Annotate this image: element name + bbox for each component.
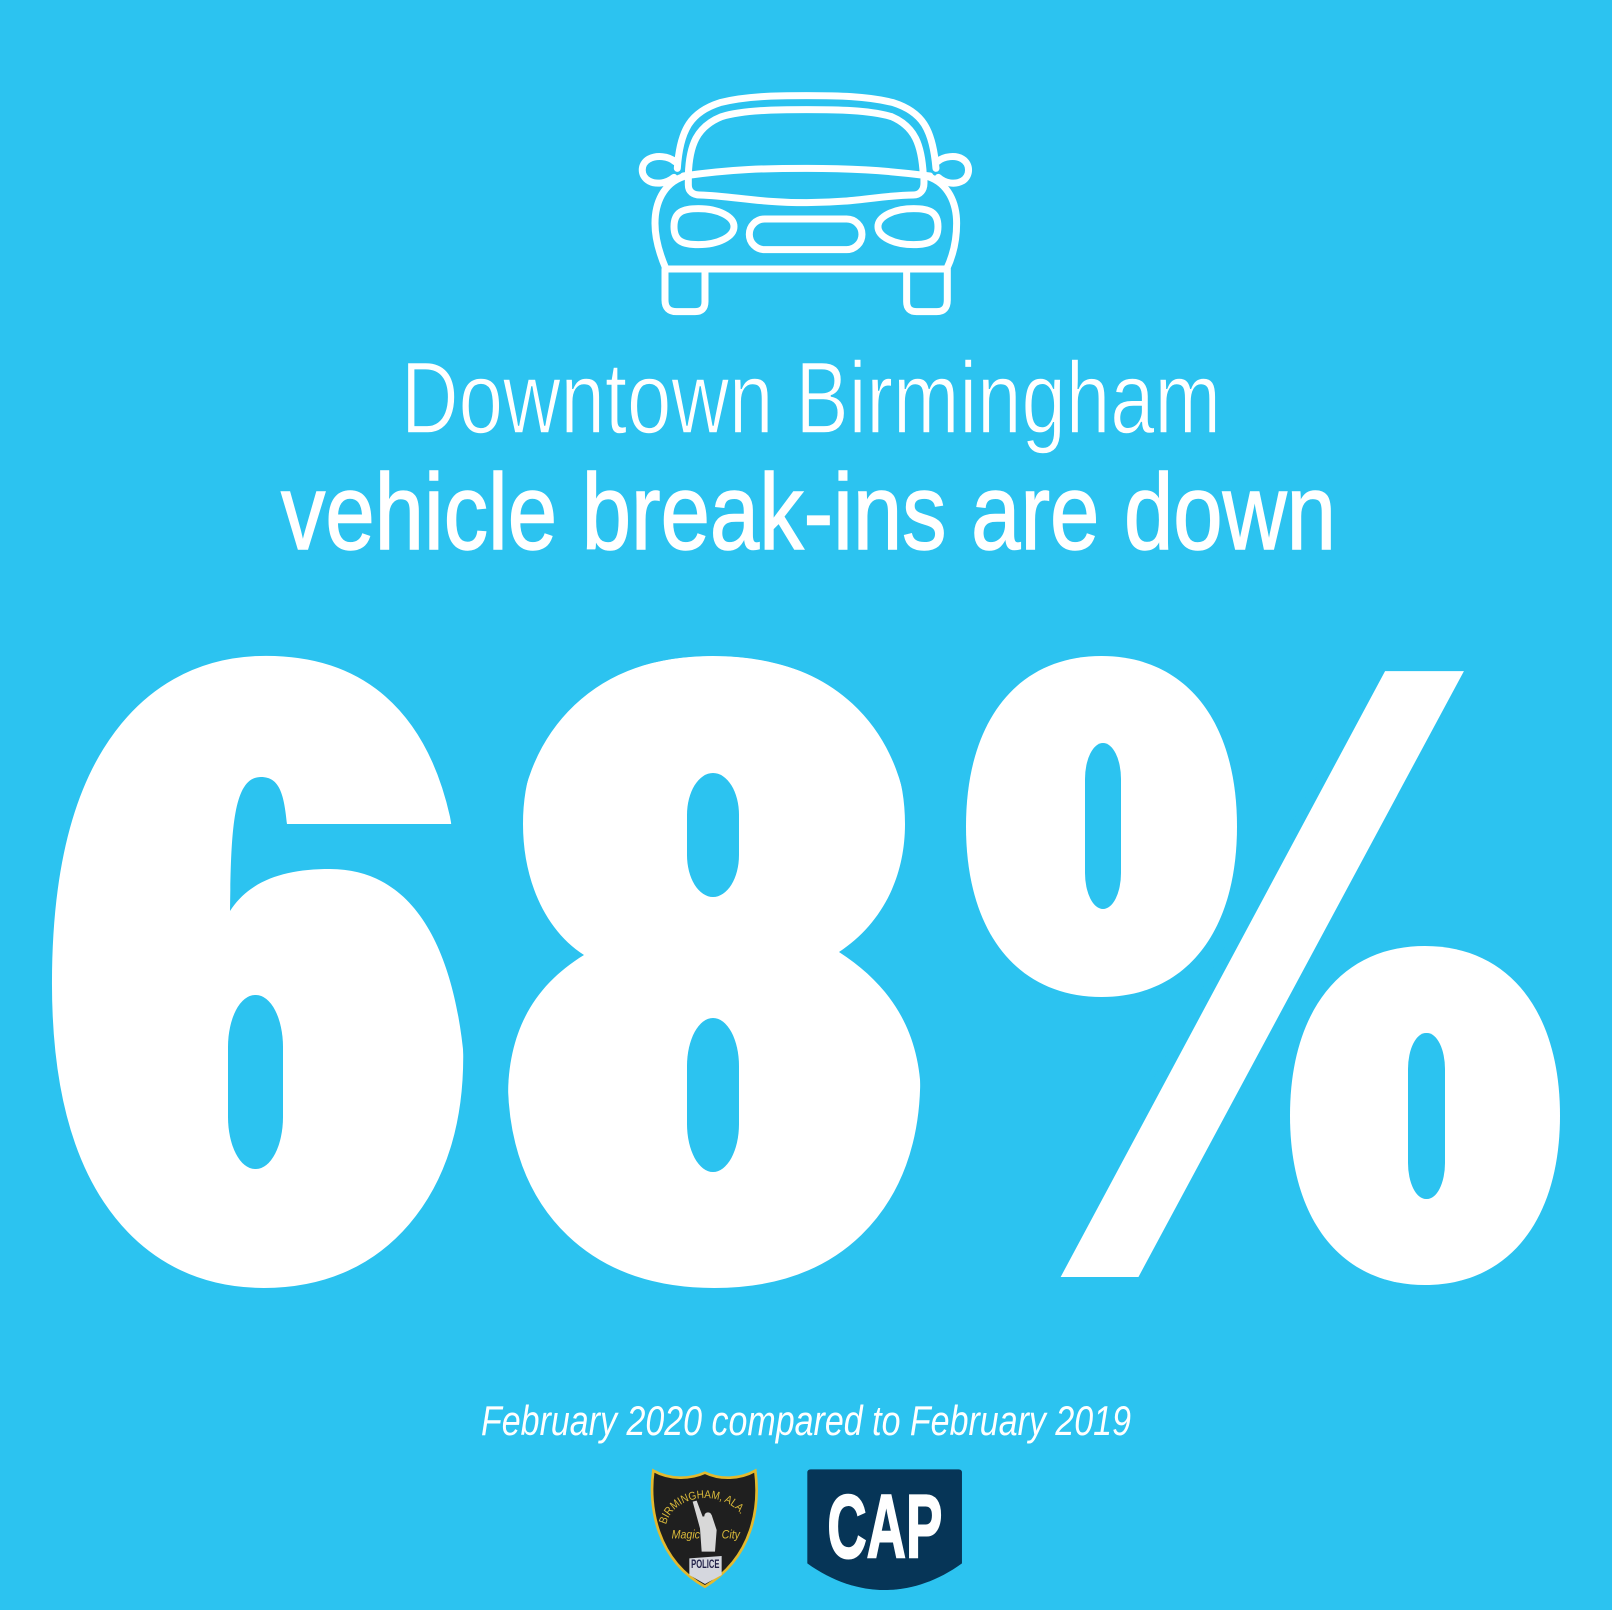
- percent sign: %: [944, 484, 1580, 1459]
- logo: Birmingham police shield: City: [722, 1528, 741, 1542]
- logo: Birmingham police shield: BIRMINGHAM, ALA.: [658, 1490, 743, 1524]
- footnote: February 2020 compared to February 2019: [481, 1397, 1131, 1444]
- logo: Birmingham police shield: POLICE: [691, 1557, 719, 1571]
- digit 6: 6: [85, 574, 430, 1368]
- logo: CAP: [807, 1469, 962, 1590]
- percent rings: [966, 656, 1560, 1285]
- icon: car front view: [642, 96, 969, 312]
- logo: Birmingham police shield: Magic: [672, 1528, 700, 1542]
- heading line 1: Downtown Birmingham: [401, 341, 1221, 455]
- logo: Birmingham police shield: [650, 1468, 758, 1588]
- digit and percent letterform trims: [228, 640, 1612, 1300]
- heading line 2: vehicle break-ins are down: [281, 451, 1336, 572]
- logo: CAP: CAP: [827, 1477, 942, 1577]
- big statistic: 68%: [85, 484, 1612, 1459]
- digit 8: 8: [544, 573, 884, 1368]
- percent ring counters: [1085, 743, 1445, 1199]
